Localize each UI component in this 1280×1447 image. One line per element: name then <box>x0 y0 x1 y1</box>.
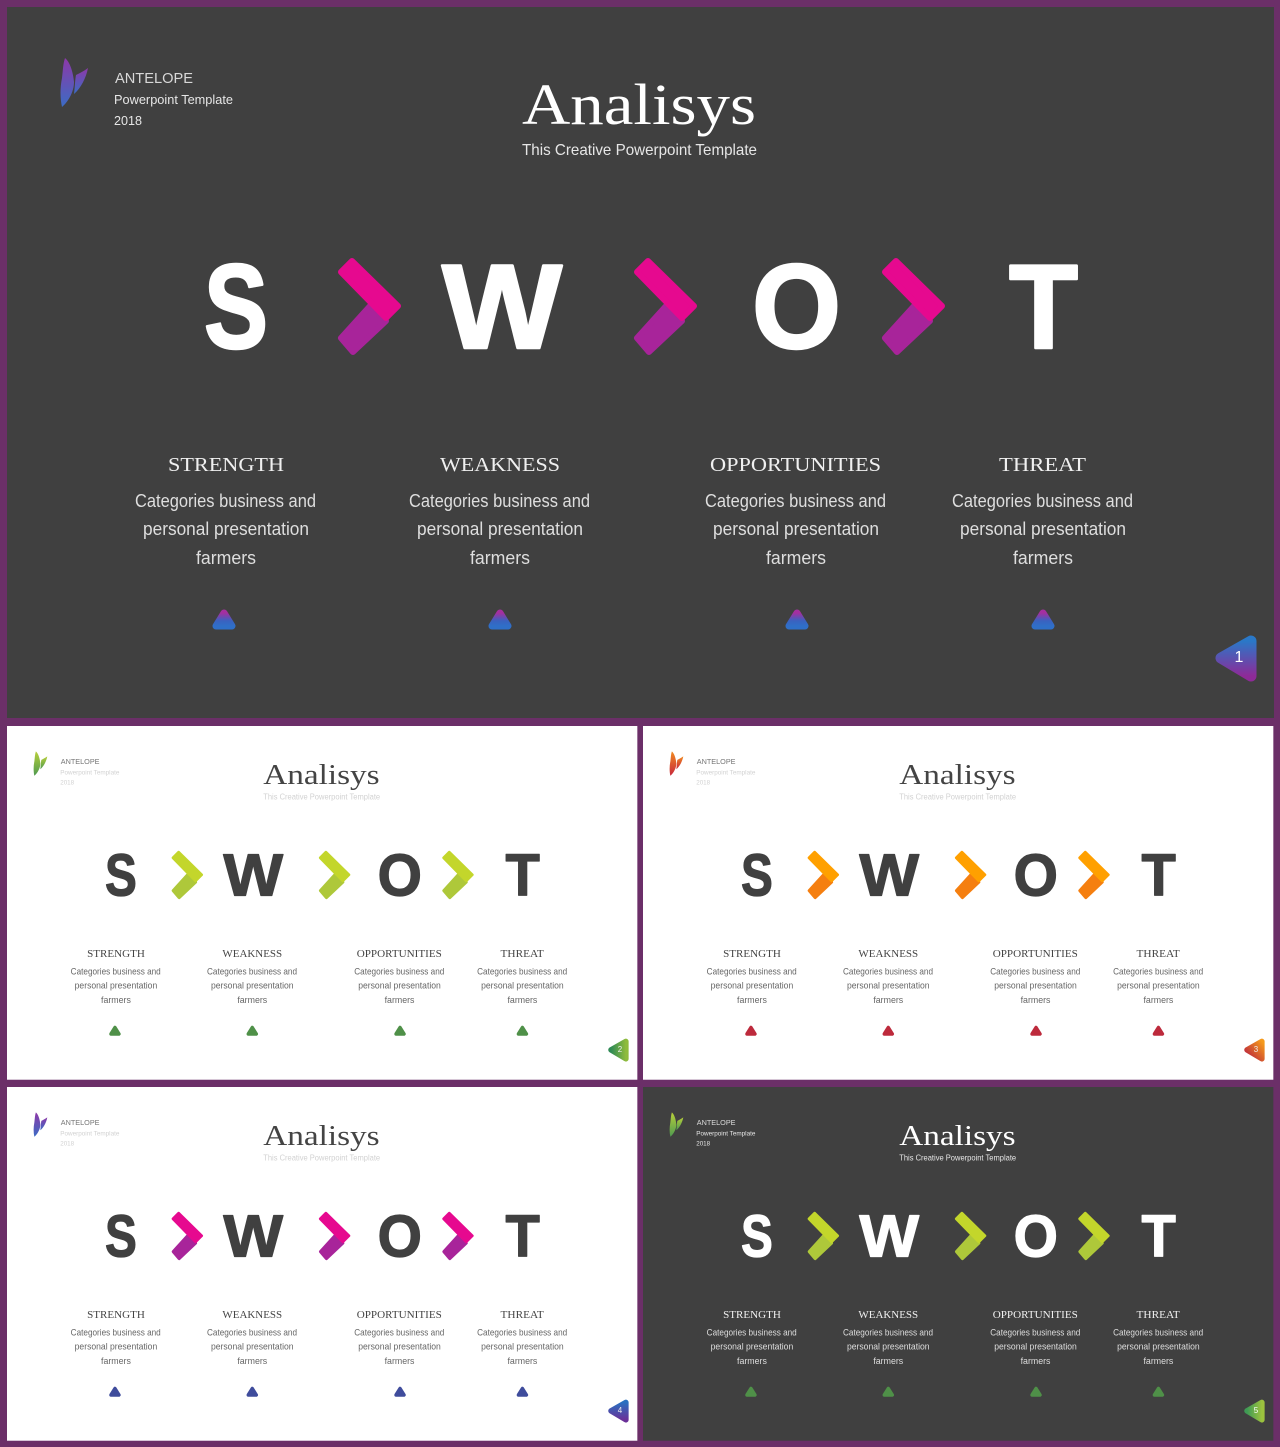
title: Analisys <box>899 1120 1016 1152</box>
page number badge: 1 <box>1235 649 1244 666</box>
column: strength: Categories business and <box>135 491 316 511</box>
column: threat: personal presentation <box>481 981 564 991</box>
brand text: ANTELOPE <box>697 757 736 766</box>
page number badge: 2 <box>618 1045 623 1054</box>
column: opportunities <box>990 949 1080 1034</box>
brand text <box>60 757 120 787</box>
column: threat <box>477 1310 567 1395</box>
column: weakness: farmers <box>873 995 904 1005</box>
SWOT letters and arrows: S <box>204 240 268 374</box>
brand text: Powerpoint Template <box>60 1130 120 1137</box>
title: Analisys <box>899 759 1016 791</box>
column: strength: farmers <box>737 995 767 1005</box>
SWOT letters and arrows: W <box>223 842 284 909</box>
SWOT letters and arrows: O <box>378 1203 422 1270</box>
SWOT letters and arrows: O <box>378 842 422 909</box>
column: strength <box>707 949 797 1034</box>
column: weakness: Categories business and <box>207 967 297 977</box>
column: weakness <box>843 1310 933 1395</box>
column: opportunities: Categories business and <box>990 967 1080 977</box>
title: Analisys <box>263 759 380 791</box>
column: weakness: personal presentation <box>211 981 294 991</box>
SWOT letters and arrows: O <box>752 240 841 374</box>
column: weakness <box>207 1310 297 1395</box>
column: strength: Categories business and <box>71 1328 161 1338</box>
column: threat: Categories business and <box>477 967 567 977</box>
column: threat: Categories business and <box>477 1328 567 1338</box>
brand text <box>114 70 233 128</box>
panel: dark slide 5 lime <box>643 1087 1273 1441</box>
column: threat: THREAT <box>501 1310 544 1321</box>
column: strength <box>71 949 161 1034</box>
page number badge <box>1247 1041 1262 1059</box>
column: strength <box>707 1310 797 1395</box>
SWOT letters and arrows: T <box>505 842 540 909</box>
column: strength: farmers <box>101 1356 131 1366</box>
SWOT letters and arrows <box>741 842 1176 909</box>
SWOT letters and arrows: W <box>223 1203 284 1270</box>
logo icon <box>34 751 47 776</box>
column: opportunities: Categories business and <box>705 491 886 511</box>
SWOT letters and arrows <box>204 240 1078 374</box>
title: This Creative Powerpoint Template <box>263 1154 381 1163</box>
brand text: Powerpoint Template <box>696 1130 756 1137</box>
column: threat: Categories business and <box>1113 967 1203 977</box>
column: weakness <box>409 454 590 626</box>
SWOT letters and arrows <box>741 1203 1176 1270</box>
SWOT letters and arrows: T <box>1009 240 1078 374</box>
column: threat: THREAT <box>999 454 1086 476</box>
page number badge: 5 <box>1254 1406 1259 1415</box>
column: weakness: personal presentation <box>847 981 930 991</box>
column: opportunities: OPPORTUNITIES <box>710 454 881 476</box>
title: This Creative Powerpoint Template <box>522 142 757 159</box>
column: threat: THREAT <box>1137 949 1180 960</box>
logo icon <box>60 58 88 107</box>
column: strength <box>135 454 316 626</box>
column: opportunities: personal presentation <box>994 1342 1077 1352</box>
brand text: ANTELOPE <box>61 1118 100 1127</box>
column: strength: STRENGTH <box>723 949 781 960</box>
column: weakness: WEAKNESS <box>858 1310 918 1321</box>
column: strength: Categories business and <box>707 1328 797 1338</box>
panel: light slide 4 magenta <box>7 1087 637 1441</box>
column: threat: farmers <box>1143 995 1174 1005</box>
SWOT letters and arrows <box>105 1203 540 1270</box>
column: strength <box>71 1310 161 1395</box>
column: weakness: Categories business and <box>207 1328 297 1338</box>
column: threat <box>952 454 1133 626</box>
column: opportunities: OPPORTUNITIES <box>357 949 442 960</box>
column: strength: personal presentation <box>75 1342 157 1352</box>
SWOT letters and arrows: S <box>105 1203 137 1270</box>
column: weakness: WEAKNESS <box>222 1310 282 1321</box>
column: opportunities: personal presentation <box>994 981 1077 991</box>
column: opportunities: personal presentation <box>713 519 879 539</box>
column: weakness: personal presentation <box>211 1342 294 1352</box>
title: Analisys <box>263 1120 380 1152</box>
column: threat: farmers <box>1143 1356 1174 1366</box>
column: strength: STRENGTH <box>87 949 145 960</box>
SWOT letters and arrows: S <box>105 842 137 909</box>
SWOT letters and arrows: W <box>442 240 563 374</box>
column: opportunities: OPPORTUNITIES <box>993 949 1078 960</box>
column: opportunities: OPPORTUNITIES <box>357 1310 442 1321</box>
column: threat: THREAT <box>1137 1310 1180 1321</box>
column: weakness: WEAKNESS <box>858 949 918 960</box>
column: threat: farmers <box>507 1356 538 1366</box>
column: threat <box>1113 949 1203 1034</box>
column: threat: farmers <box>507 995 538 1005</box>
panel: light slide 3 orange <box>643 726 1273 1080</box>
logo icon <box>670 751 683 776</box>
brand text: ANTELOPE <box>697 1118 736 1127</box>
page number badge <box>611 1402 626 1420</box>
brand text <box>60 1118 120 1148</box>
SWOT letters and arrows: S <box>741 1203 773 1270</box>
SWOT letters and arrows: O <box>1014 1203 1058 1270</box>
column: threat <box>477 949 567 1034</box>
column: weakness: WEAKNESS <box>222 949 282 960</box>
column: weakness: farmers <box>873 1356 904 1366</box>
column: strength: Categories business and <box>71 967 161 977</box>
column: weakness <box>843 949 933 1034</box>
brand text: Powerpoint Template <box>696 769 756 776</box>
column: opportunities: Categories business and <box>354 967 444 977</box>
column: weakness: farmers <box>470 548 530 568</box>
column: opportunities <box>354 949 444 1034</box>
column: threat: Categories business and <box>952 491 1133 511</box>
column: weakness: personal presentation <box>417 519 583 539</box>
title <box>899 759 1017 802</box>
column: weakness: WEAKNESS <box>440 454 560 476</box>
column: opportunities: personal presentation <box>358 1342 441 1352</box>
brand text: ANTELOPE <box>115 70 193 87</box>
column: threat <box>1113 1310 1203 1395</box>
title <box>522 72 757 159</box>
page number badge <box>1247 1402 1262 1420</box>
column: weakness: Categories business and <box>409 491 590 511</box>
brand text: 2018 <box>60 1141 75 1148</box>
page number badge <box>1221 641 1251 676</box>
column: strength: personal presentation <box>711 1342 793 1352</box>
column: threat: personal presentation <box>1117 981 1200 991</box>
brand text: 2018 <box>60 780 75 787</box>
column: weakness: farmers <box>237 1356 268 1366</box>
title: This Creative Powerpoint Template <box>899 793 1017 802</box>
column: weakness <box>207 949 297 1034</box>
brand text: 2018 <box>696 780 711 787</box>
title: This Creative Powerpoint Template <box>263 793 381 802</box>
column: weakness: personal presentation <box>847 1342 930 1352</box>
SWOT letters and arrows: T <box>505 1203 540 1270</box>
SWOT letters and arrows: O <box>1014 842 1058 909</box>
logo icon <box>34 1112 47 1137</box>
column: strength: personal presentation <box>143 519 309 539</box>
column: opportunities <box>354 1310 444 1395</box>
column: threat: THREAT <box>501 949 544 960</box>
brand text: 2018 <box>114 113 142 128</box>
SWOT letters and arrows: W <box>859 842 920 909</box>
column: opportunities: farmers <box>385 995 415 1005</box>
column: strength: STRENGTH <box>723 1310 781 1321</box>
column: strength: STRENGTH <box>87 1310 145 1321</box>
brand text <box>696 757 756 787</box>
column: strength: personal presentation <box>711 981 793 991</box>
column: strength: STRENGTH <box>168 454 284 476</box>
column: threat: personal presentation <box>960 519 1126 539</box>
page number badge: 3 <box>1254 1045 1259 1054</box>
column: opportunities: farmers <box>1021 1356 1051 1366</box>
title: Analisys <box>522 72 756 137</box>
column: opportunities: Categories business and <box>990 1328 1080 1338</box>
column: strength: Categories business and <box>707 967 797 977</box>
column: opportunities <box>705 454 886 626</box>
column: threat: farmers <box>1013 548 1073 568</box>
SWOT letters and arrows: S <box>741 842 773 909</box>
column: opportunities <box>990 1310 1080 1395</box>
SWOT letters and arrows: T <box>1141 1203 1176 1270</box>
title <box>899 1120 1017 1163</box>
title: This Creative Powerpoint Template <box>899 1154 1017 1163</box>
SWOT letters and arrows: T <box>1141 842 1176 909</box>
SWOT letters and arrows: W <box>859 1203 920 1270</box>
column: opportunities: OPPORTUNITIES <box>993 1310 1078 1321</box>
column: opportunities: farmers <box>766 548 826 568</box>
panel: light slide 2 green <box>7 726 637 1080</box>
title <box>263 1120 381 1163</box>
column: threat: personal presentation <box>1117 1342 1200 1352</box>
page number badge: 4 <box>618 1406 623 1415</box>
brand text: ANTELOPE <box>61 757 100 766</box>
column: opportunities: Categories business and <box>354 1328 444 1338</box>
brand text <box>696 1118 756 1148</box>
SWOT letters and arrows <box>105 842 540 909</box>
column: weakness: farmers <box>237 995 268 1005</box>
column: opportunities: personal presentation <box>358 981 441 991</box>
column: threat: personal presentation <box>481 1342 564 1352</box>
title <box>263 759 381 802</box>
logo icon <box>670 1112 683 1137</box>
brand text: Powerpoint Template <box>114 92 233 107</box>
panel: main dark slide 1 <box>7 7 1274 718</box>
brand text: 2018 <box>696 1141 711 1148</box>
column: threat: Categories business and <box>1113 1328 1203 1338</box>
column: strength: farmers <box>196 548 256 568</box>
page number badge <box>611 1041 626 1059</box>
column: weakness: Categories business and <box>843 967 933 977</box>
column: strength: farmers <box>737 1356 767 1366</box>
column: opportunities: farmers <box>385 1356 415 1366</box>
column: strength: farmers <box>101 995 131 1005</box>
column: weakness: Categories business and <box>843 1328 933 1338</box>
column: opportunities: farmers <box>1021 995 1051 1005</box>
column: strength: personal presentation <box>75 981 157 991</box>
brand text: Powerpoint Template <box>60 769 120 776</box>
